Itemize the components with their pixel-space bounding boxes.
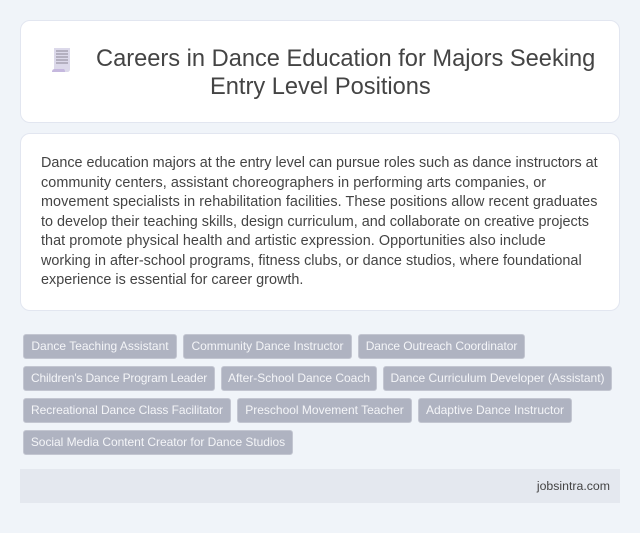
- tag: Dance Teaching Assistant: [31, 339, 169, 353]
- tag: Adaptive Dance Instructor: [426, 403, 564, 417]
- description text: experience is essential for career growth.: [41, 272, 303, 288]
- title: Entry Level Positions: [210, 74, 431, 100]
- tag: After-School Dance Coach: [228, 371, 370, 385]
- footer source text: jobsintra.com: [537, 479, 610, 493]
- tag: [183, 334, 352, 359]
- tag: [23, 366, 215, 391]
- tag: [383, 366, 612, 391]
- tag list: [23, 334, 612, 455]
- description text: Dance education majors at the entry level can pursue roles such as dance instructors at: [41, 155, 598, 171]
- icon: paper scroll: [52, 48, 70, 72]
- description text: that promote physical health and artistic expression. Opportunities also include: [41, 233, 546, 249]
- tag: [23, 398, 231, 423]
- description text: to develop their teaching skills, design curriculum, and collaborate on creative projects: [41, 214, 589, 230]
- tag: [358, 334, 525, 359]
- tag: Dance Outreach Coordinator: [366, 339, 517, 353]
- panel: description card: [20, 133, 620, 311]
- panel: header card: [20, 20, 620, 123]
- footer bar: [20, 469, 620, 503]
- tag: Children's Dance Program Leader: [31, 371, 207, 385]
- title: [96, 46, 595, 100]
- tag: [221, 366, 377, 391]
- tag: Dance Curriculum Developer (Assistant): [390, 371, 605, 385]
- description text: working in after-school programs, fitness clubs, or dance studios, where foundational: [41, 252, 582, 268]
- description text: movement specialists in rehabilitation facilities. These positions allow recent graduates: [41, 194, 597, 210]
- tag: Social Media Content Creator for Dance Studios: [31, 435, 285, 449]
- tag: Recreational Dance Class Facilitator: [31, 403, 223, 417]
- tag: [418, 398, 572, 423]
- tag: Community Dance Instructor: [191, 339, 344, 353]
- tag: [23, 334, 177, 359]
- description text: [41, 155, 598, 288]
- title: Careers in Dance Education for Majors Seeking: [96, 46, 595, 72]
- description text: community centers, assistant choreographers in performing arts companies, or: [41, 174, 546, 190]
- tag: [23, 430, 293, 455]
- tag: [237, 398, 412, 423]
- tag: Preschool Movement Teacher: [245, 403, 404, 417]
